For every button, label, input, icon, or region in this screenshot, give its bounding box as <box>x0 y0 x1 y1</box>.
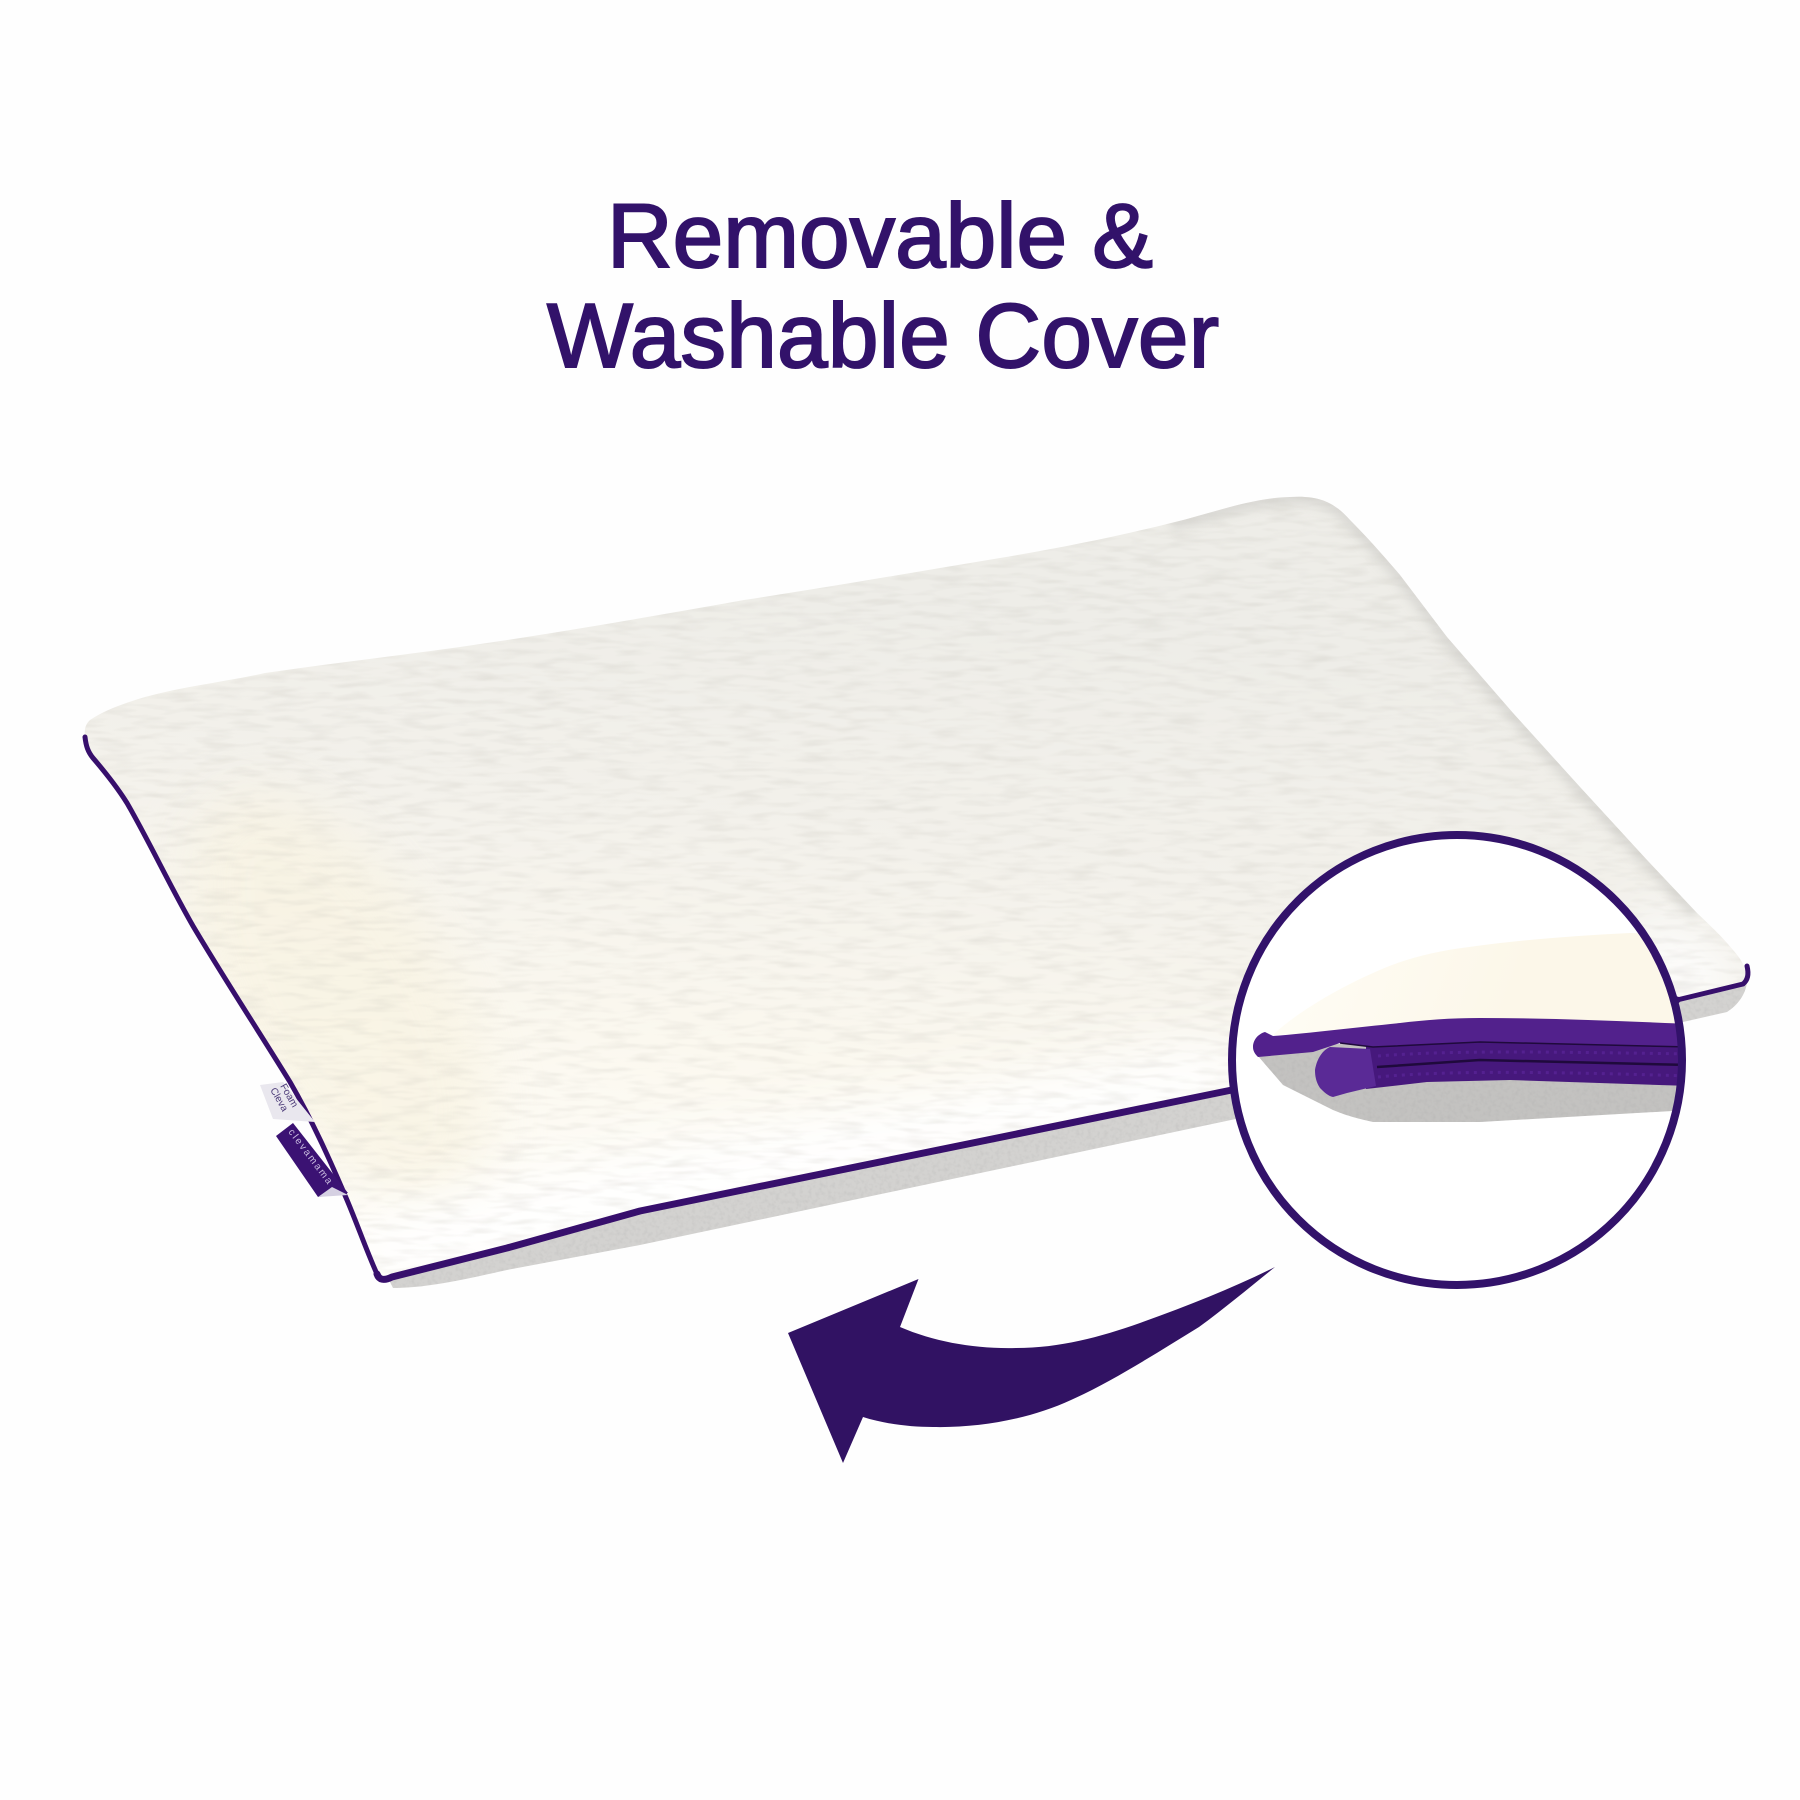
white tag <box>260 1082 315 1122</box>
title: Washable Cover <box>547 286 1219 387</box>
purple tag: clevamama <box>286 1127 334 1187</box>
callout: zoomed zipper detail <box>1232 835 1690 1285</box>
pillow cream top cover <box>85 497 1747 1277</box>
pillow purple piping <box>85 737 1748 1279</box>
grey underside swatch <box>1259 1044 1676 1122</box>
zipper pull <box>1315 1047 1376 1097</box>
lens ring <box>1232 835 1682 1285</box>
purple piping strip <box>1253 1018 1690 1057</box>
white tag: Foam <box>277 1082 300 1110</box>
pillow shading and knit texture <box>80 490 1760 1290</box>
white tag: Cleva <box>267 1086 290 1114</box>
lens white background <box>1232 835 1682 1285</box>
zipper centre seam <box>1377 1060 1690 1067</box>
pillow grey underside <box>380 980 1750 1290</box>
sewn label tags <box>260 1082 348 1197</box>
pillow <box>80 490 1760 1290</box>
zipper tooth texture <box>1378 1052 1690 1077</box>
zipper teeth <box>1366 1040 1690 1089</box>
arrow <box>788 1267 1275 1463</box>
lens contents <box>1253 933 1690 1125</box>
cream cover swatch <box>1273 933 1690 1035</box>
title <box>547 186 1219 387</box>
title: Removable & <box>607 186 1153 287</box>
